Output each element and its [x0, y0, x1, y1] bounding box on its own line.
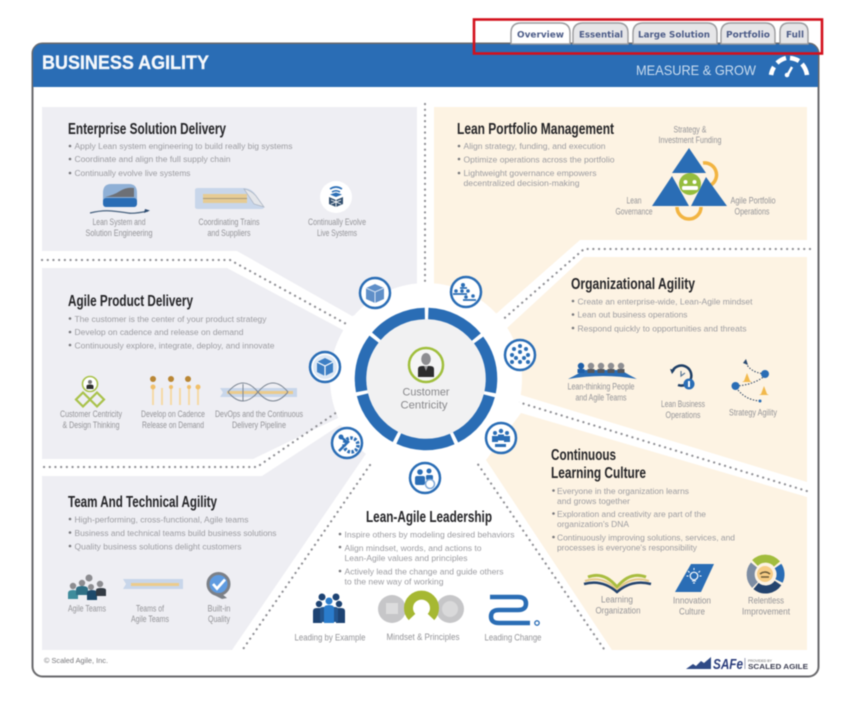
icon: innovation culture: [675, 564, 714, 592]
label: [308, 217, 366, 238]
label: [60, 409, 122, 430]
bullets: Develop on cadence and release on demand: [74, 327, 244, 337]
label: and Agile Teams: [576, 392, 627, 402]
heading: Lean Portfolio Management: [457, 121, 614, 138]
label: & Design Thinking: [62, 420, 120, 430]
label: Quality: [208, 614, 230, 624]
label: Governance: [616, 206, 652, 216]
label: Customer Centricity: [60, 409, 122, 419]
heading: Enterprise Solution Delivery: [68, 121, 226, 138]
label: Live Systems: [317, 228, 357, 238]
hub label: [400, 386, 450, 412]
bullets: to the new way of working: [344, 576, 444, 586]
label: Operations: [666, 410, 701, 420]
bullets: [458, 141, 615, 188]
label: Agile Teams: [131, 614, 169, 624]
tab: essential: [573, 23, 628, 44]
logo: safe provided by scaled agile: SAFe: [713, 656, 743, 673]
tab: large solution: [633, 23, 717, 44]
logo: safe provided by scaled agile: SCALED AGILE: [748, 662, 808, 671]
tab: overview: Overview: [517, 30, 564, 40]
label: Operations: [734, 206, 770, 216]
panel: agile product delivery: [42, 268, 343, 459]
panel: continuous learning culture: [486, 413, 807, 650]
bullets: [69, 314, 275, 350]
icon: leadership badge: [410, 463, 440, 493]
bullets: Continually evolve live systems: [74, 168, 190, 178]
bullets: Quality business solutions delight customers: [74, 542, 242, 552]
label: Delivery Pipeline: [232, 420, 286, 430]
bullets: Lean-Agile values and principles: [344, 553, 468, 563]
label: [208, 604, 230, 624]
tab: essential: Essential: [579, 30, 623, 40]
label: [198, 217, 260, 238]
copyright: © Scaled Agile, Inc.: [44, 656, 108, 665]
bullets: decentralized decision-making: [464, 178, 580, 188]
label: Culture: [679, 606, 705, 616]
icon: continuous learning badge: [486, 423, 516, 453]
bullets: Actively lead the change and guide others: [344, 566, 504, 576]
icon: enterprise solution delivery badge: [360, 278, 390, 308]
icon: teams of agile teams: [123, 579, 183, 589]
tab: full: Full: [786, 30, 804, 40]
bullets: Continuously explore, integrate, deploy, and innovate: [74, 340, 275, 350]
bullets: Inspire others by modeling desired behaviors: [344, 530, 514, 540]
icon: cadence and release: [150, 376, 200, 405]
segmented ring: [358, 311, 494, 447]
icon: lean-thinking people: [568, 363, 637, 379]
label: Improvement: [742, 606, 790, 616]
label: Relentless: [748, 596, 784, 606]
bullets: Continuously improving solutions, services, and: [557, 532, 735, 542]
bullets: [572, 296, 753, 334]
icon: relentless improvement: [751, 559, 781, 590]
label: Built-in: [208, 604, 230, 614]
view tabs: [511, 23, 808, 44]
label: [131, 604, 169, 624]
bullets: High-performing, cross-functional, Agile teams: [74, 514, 248, 524]
label: [141, 409, 205, 430]
icon: lean business operations: [670, 366, 694, 390]
label: Continually Evolve: [308, 217, 366, 227]
bullets: Apply Lean system engineering to build really big systems: [74, 141, 292, 151]
heading: [551, 447, 646, 482]
heading: Team And Technical Agility: [68, 494, 217, 511]
dotted dividers: [42, 104, 810, 652]
label: [730, 196, 776, 216]
bullets: Business and technical teams build business solutions: [74, 528, 276, 538]
icon: organizational agility badge: [505, 340, 535, 370]
heading: Continuous: [551, 447, 616, 464]
label: [596, 594, 640, 616]
heading: Lean-Agile Leadership: [366, 509, 492, 526]
red highlight box: [474, 20, 822, 54]
label: [568, 382, 634, 402]
label: [661, 399, 705, 420]
bullets: Lean out business operations: [578, 310, 688, 320]
icon: evolve live systems: [320, 181, 352, 213]
panel: team and technical agility: [42, 425, 372, 650]
label: Agile Portfolio: [730, 196, 776, 206]
icon: devops pipeline: [220, 383, 297, 401]
tab: full: [780, 23, 808, 44]
label: DevOps and the Continuous: [215, 409, 303, 419]
bullets: Coordinate and align the full supply chain: [74, 154, 231, 164]
label: Release on Demand: [142, 420, 204, 430]
bullets: Optimize operations across the portfolio: [464, 154, 615, 164]
icon: customer: [409, 348, 443, 382]
bullets: [552, 486, 735, 552]
bullets: Align strategy, funding, and execution: [464, 141, 606, 151]
bullets: [69, 514, 276, 552]
label: [616, 196, 652, 216]
icon: built-in quality: [208, 574, 229, 599]
icon: strategy agility: [732, 359, 769, 402]
label: Innovation: [673, 596, 711, 606]
label: Develop on Cadence: [141, 409, 205, 419]
label: Solution Engineering: [86, 228, 152, 238]
label: Lean Business: [661, 399, 705, 409]
label: Lean System and: [92, 217, 146, 227]
tab: large solution: Large Solution: [638, 30, 710, 40]
tab: portfolio: Portfolio: [726, 30, 770, 40]
label: Lean: [626, 196, 642, 206]
panel: organizational agility: [507, 257, 807, 482]
bullets: [69, 141, 292, 178]
icon: portfolio triangle: [652, 148, 727, 219]
bullets: Lightweight governance empowers: [464, 168, 596, 178]
icon: agile teams: [68, 574, 106, 600]
customer centricity hub: [310, 277, 535, 493]
label: Learning: [601, 594, 633, 604]
label: [86, 217, 152, 238]
header bar: [33, 44, 818, 87]
bullets: The customer is the center of your product strategy: [74, 314, 267, 324]
label: and Suppliers: [208, 228, 251, 238]
icon: lean system: [90, 184, 150, 213]
hub label: Centricity: [400, 400, 448, 412]
logo: safe provided by scaled agile: [686, 656, 808, 673]
bullets: organization's DNA: [557, 519, 629, 529]
bullets: Respond quickly to opportunities and threats: [578, 324, 746, 334]
icon: agile product delivery badge: [310, 352, 340, 382]
label: [215, 409, 303, 430]
label: Strategy &: [674, 124, 706, 134]
icon: train: [195, 188, 264, 209]
label: Coordinating Trains: [198, 217, 260, 227]
icon: team agility badge: [332, 428, 362, 458]
logo: safe provided by scaled agile: PROVIDED BY: [748, 659, 773, 663]
bullets: Exploration and creativity are part of the: [557, 509, 706, 519]
label: Investment Funding: [658, 135, 722, 145]
heading: Agile Product Delivery: [68, 293, 193, 310]
label: Teams of: [136, 604, 164, 614]
bullets: Create an enterprise-wide, Lean-Agile mindset: [578, 296, 753, 306]
bullets: and grows together: [557, 496, 630, 506]
icon: leading change: [490, 597, 539, 625]
label: Lean-thinking People: [568, 382, 634, 392]
heading: business agility: BUSINESS AGILITY: [42, 53, 209, 74]
icon: customer centricity: [76, 376, 104, 406]
label: Organization: [596, 606, 640, 616]
icon: lean portfolio badge: [451, 277, 481, 307]
icon: leading by example: [313, 594, 345, 623]
label: Leading Change: [484, 632, 542, 642]
measure and grow label: MEASURE & GROW: [636, 62, 757, 78]
icon: gauge: [771, 58, 807, 77]
panel: enterprise solution delivery: [42, 107, 417, 316]
label: Strategy Agility: [729, 408, 777, 418]
heading: Organizational Agility: [571, 276, 695, 293]
hub label: Customer: [402, 386, 450, 398]
label: Agile Teams: [68, 604, 106, 614]
label: [673, 596, 711, 616]
label: Leading by Example: [294, 632, 366, 642]
tab: overview: [511, 23, 570, 44]
label: Mindset & Principles: [386, 632, 460, 642]
label: [742, 596, 790, 616]
icon: mindset and principles: [378, 595, 464, 623]
heading: Learning Culture: [551, 465, 646, 482]
label: [658, 124, 722, 145]
bullets: processes is everyone's responsibility: [557, 542, 698, 552]
panel: lean-agile leadership: [294, 509, 542, 642]
bullets: [339, 530, 514, 586]
bullets: Everyone in the organization learns: [557, 486, 689, 496]
tab: portfolio: [721, 23, 775, 44]
bullets: Align mindset, words, and actions to: [344, 543, 482, 553]
icon: open book: [584, 575, 651, 592]
panel: lean portfolio management: [434, 107, 807, 330]
